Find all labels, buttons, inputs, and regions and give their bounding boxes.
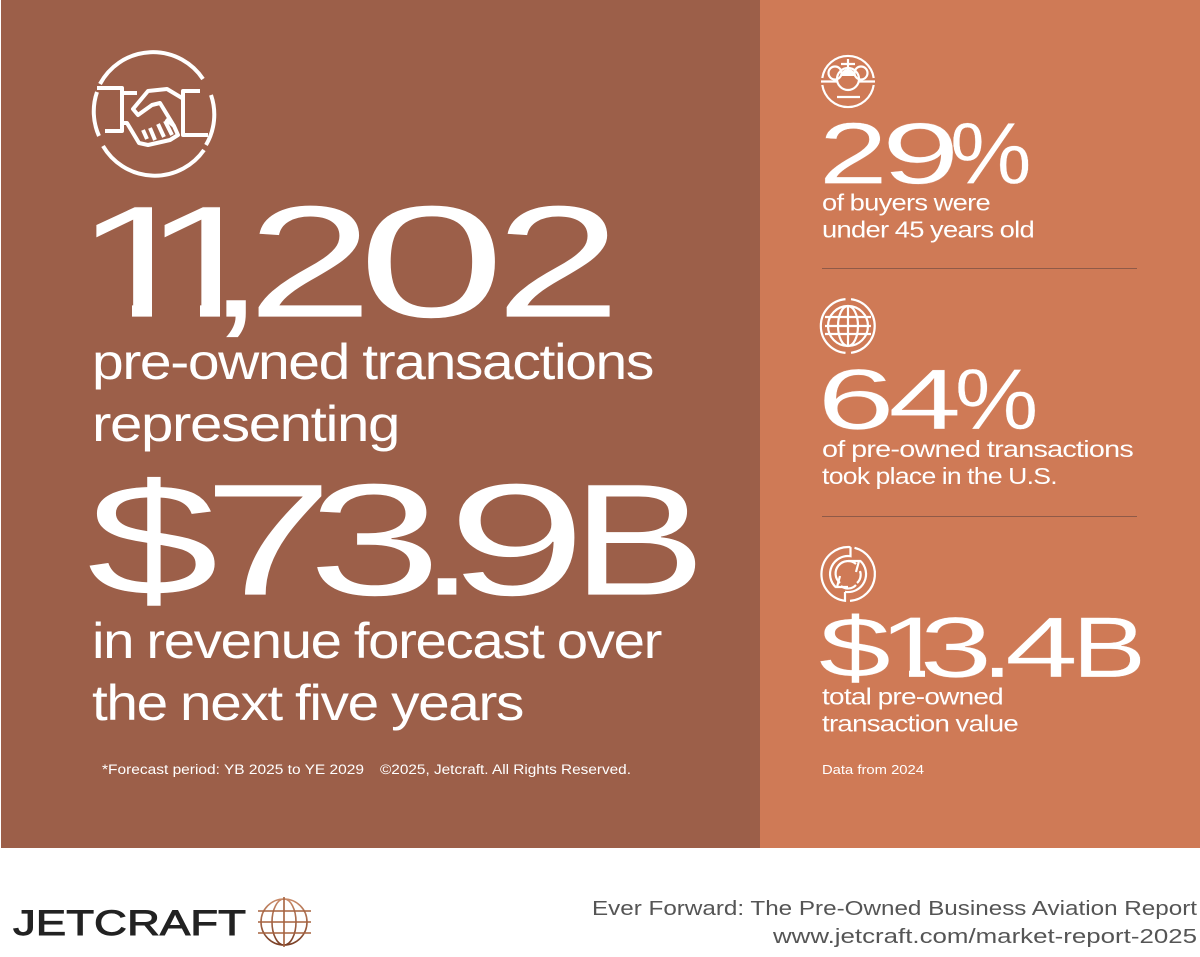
big number: $73.9B: 3 <box>307 450 442 629</box>
icon: handshake <box>94 52 214 176</box>
big number: $73.9B: 9 <box>447 450 587 629</box>
big number: 11,202: 2 <box>247 172 373 351</box>
stat: 29%: % <box>950 105 1032 202</box>
text: buyers under 45: under 45 years old <box>822 216 1034 242</box>
text: transactions in U.S.: of pre-owned transactions <box>822 436 1133 462</box>
text: report title and url: Ever Forward: The Pre-Owned Business Aviation Report <box>592 897 1197 920</box>
big number: $73.9B <box>86 450 706 630</box>
text: revenue forecast <box>92 613 662 731</box>
text: buyers under 45: of buyers were <box>822 190 990 216</box>
stat: $13.4B: 1 <box>879 600 947 696</box>
big number: $73.9B: 7 <box>202 450 334 629</box>
footnote: forecast period and copyright <box>102 762 631 777</box>
stat: $13.4B: B <box>1072 600 1146 696</box>
big number: 11,202: 1 <box>141 172 273 351</box>
big number: 11,202: 2 <box>495 172 622 351</box>
text: pre-owned transactions representing: representing <box>92 396 399 452</box>
stat: 64%: 4 <box>888 351 961 448</box>
logo: Jetcraft wordmark: JETCRAFT <box>13 904 246 943</box>
stat: 64%: 6 <box>817 351 895 447</box>
text: total transaction value <box>822 684 1018 736</box>
big number: $73.9B: . <box>419 450 476 629</box>
stat: 64% <box>817 351 1038 448</box>
text: pre-owned transactions representing: pre-owned transactions <box>92 334 653 390</box>
text: total transaction value: transaction value <box>822 710 1018 736</box>
text: revenue forecast: the next five years <box>92 675 523 731</box>
footnote: forecast period and copyright: *Forecast period: YB 2025 to YE 2029 <box>102 762 364 777</box>
big number: $73.9B: B <box>571 450 706 629</box>
stat: $13.4B <box>820 613 1140 683</box>
stat: $13.4B: 4 <box>1005 599 1078 696</box>
text: report title and url: www.jetcraft.com/market-report-2025 <box>772 925 1197 948</box>
note: data year: Data from 2024 <box>822 762 924 777</box>
stat: 29%: 2 <box>819 105 888 202</box>
panel: right stats <box>760 0 1200 848</box>
stat: $13.4B: $ <box>819 600 891 696</box>
stat: 64%: % <box>955 352 1038 448</box>
icon: circular arrows <box>821 547 875 601</box>
text: report title and url <box>592 897 1197 948</box>
text: total transaction value: total pre-owned <box>822 684 1003 710</box>
text: buyers under 45 <box>822 190 1034 242</box>
stat: 29%: 9 <box>882 104 960 202</box>
icon: globe <box>821 299 875 353</box>
icon: logo globe <box>258 897 311 947</box>
text: transactions in U.S. <box>822 436 1133 489</box>
text: transactions in U.S.: took place in the U.S. <box>822 463 1057 489</box>
stat: $13.4B: 3 <box>920 600 992 696</box>
text: revenue forecast: in revenue forecast over <box>92 613 662 669</box>
footnote: forecast period and copyright: ©2025, Jetcraft. All Rights Reserved. <box>380 762 631 777</box>
text: pre-owned transactions representing <box>92 334 653 452</box>
big number: 11,202: , <box>206 172 265 351</box>
stat: 29% <box>819 104 1032 202</box>
footer <box>13 897 1197 948</box>
big number: $73.9B: $ <box>86 451 219 630</box>
big number: 11,202: 1 <box>73 172 205 351</box>
icon: aircraft front <box>821 56 875 107</box>
panel: left headline <box>1 0 760 848</box>
big number: 11,202: 0 <box>357 172 506 351</box>
stat: $13.4B: . <box>981 600 1013 696</box>
big number: 11,202 <box>96 206 610 338</box>
